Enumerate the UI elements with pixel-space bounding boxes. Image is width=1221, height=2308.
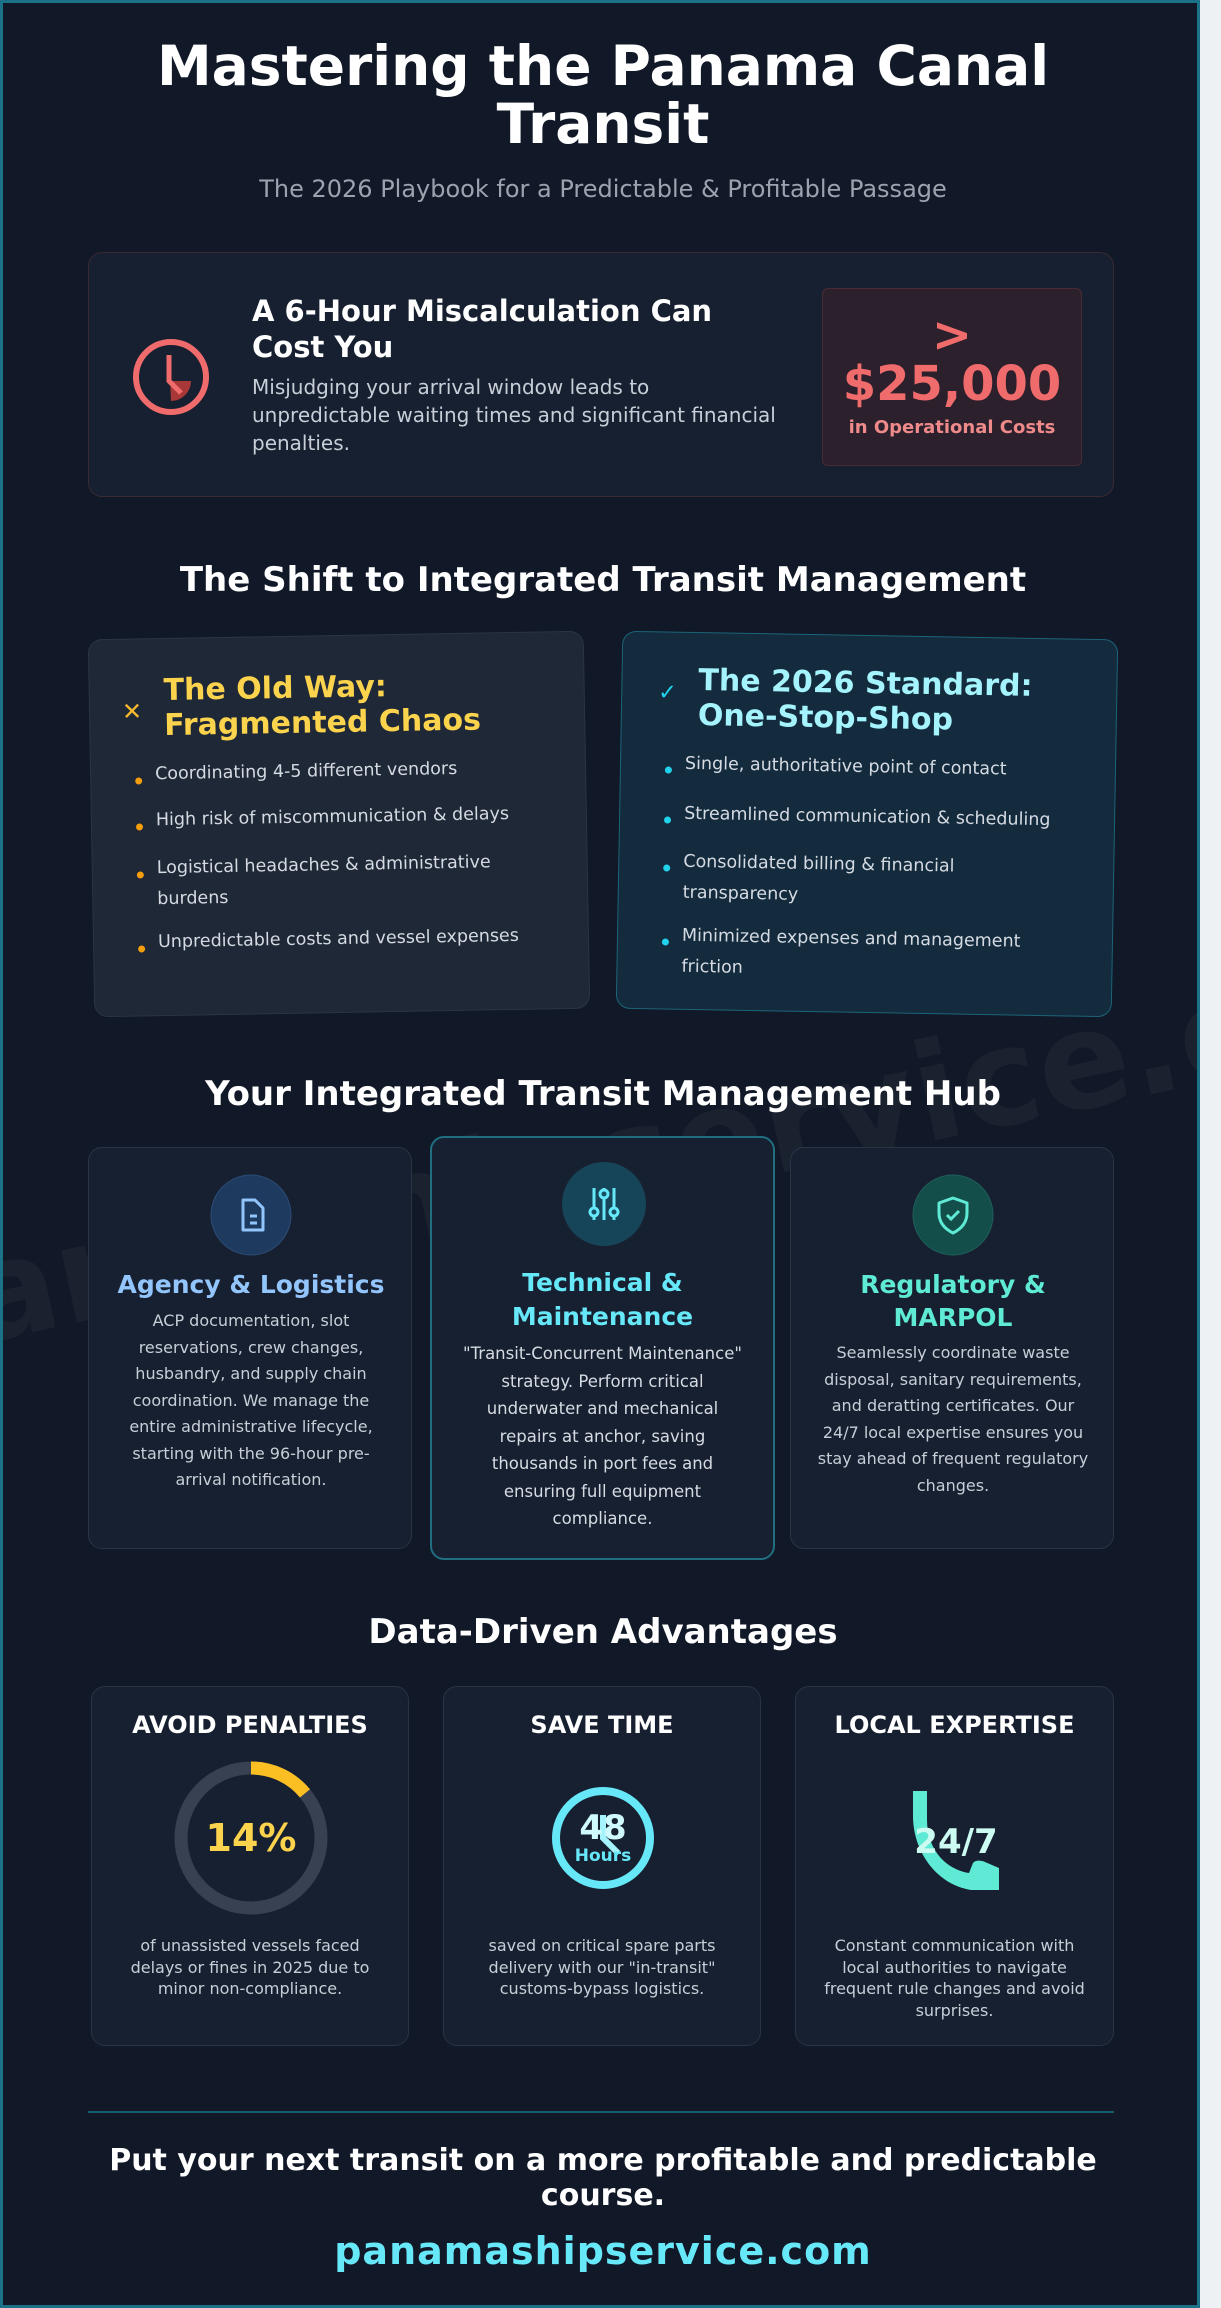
icon: document bbox=[210, 1174, 292, 1256]
alert heading: A 6-Hour Miscalculation Can Cost You bbox=[252, 294, 712, 364]
panel: 2026 standard bbox=[616, 631, 1118, 1017]
regulatory title: Regulatory & bbox=[860, 1270, 1046, 1299]
stat title: SAVE TIME bbox=[530, 1711, 674, 1739]
regulatory text: Seamlessly coordinate waste disposal, sanitary requirements, and deratting certificates. Our 24/7 local expertise ensures you stay ahead of frequent regulatory changes. bbox=[818, 1343, 1088, 1494]
stat: local bbox=[795, 1686, 1114, 2046]
heading: hub: Your Integrated Transit Management Hub bbox=[205, 1074, 1001, 1114]
icon: sliders bbox=[562, 1162, 646, 1246]
old way bullets: Logistical headaches & administrative burdens bbox=[157, 852, 491, 909]
icon: clock 48 hours bbox=[552, 1787, 654, 1889]
icon: clock bbox=[133, 339, 209, 415]
stat: time bbox=[443, 1686, 761, 2046]
regulatory title: MARPOL bbox=[894, 1303, 1012, 1332]
old way title: Fragmented Chaos bbox=[164, 703, 481, 743]
stat title: AVOID PENALTIES bbox=[132, 1711, 368, 1739]
standard bullets: Streamlined communication & scheduling bbox=[684, 804, 1051, 830]
technical title: Technical & bbox=[522, 1268, 683, 1297]
title: Mastering the Panama Canal bbox=[157, 34, 1049, 98]
technical title bbox=[512, 1268, 693, 1331]
icon: phone 24/7: 24/7 bbox=[914, 1822, 998, 1862]
icon: clock 48 hours: 48 bbox=[579, 1808, 627, 1848]
panel: agency bbox=[88, 1147, 412, 1549]
agency text: ACP documentation, slot reservations, crew changes, husbandry, and supply chain coordination. We manage the entire administrative lifecycle, starting with the 96-hour pre-arrival notification. bbox=[129, 1311, 373, 1489]
standard bullets bbox=[662, 754, 1051, 978]
standard title: One-Stop-Shop bbox=[698, 698, 953, 737]
old way bullets bbox=[135, 759, 519, 952]
stat title: LOCAL EXPERTISE bbox=[835, 1711, 1074, 1739]
call to action: Put your next transit on a more profitable and predictable course. bbox=[109, 2143, 1097, 2213]
icon: x: ✕ bbox=[122, 697, 142, 726]
title: Transit bbox=[497, 92, 709, 156]
standard bullets: Consolidated billing & financial transparency bbox=[683, 852, 955, 905]
alert text: Misjudging your arrival window leads to unpredictable waiting times and significant financial penalties. bbox=[252, 375, 776, 455]
stat text: of unassisted vessels faced delays or fines in 2025 due to minor non-compliance. bbox=[131, 1936, 369, 1998]
standard title: The 2026 Standard: bbox=[698, 663, 1033, 704]
divider bbox=[88, 2111, 1114, 2113]
technical text: "Transit-Concurrent Maintenance" strategy. Perform critical underwater and mechanical repairs at anchor, saving thousands in port fees and ensuring full equipment compliance. bbox=[463, 1344, 742, 1528]
regulatory title bbox=[860, 1270, 1046, 1332]
icon: phone 24/7 bbox=[913, 1791, 999, 1890]
old way title bbox=[163, 669, 481, 743]
stat text: Constant communication with local authorities to navigate frequent rule changes and avoid surprises. bbox=[824, 1936, 1085, 2020]
cost stat box bbox=[822, 288, 1082, 466]
old way bullets: Coordinating 4-5 different vendors bbox=[155, 759, 457, 784]
heading: shift: The Shift to Integrated Transit Management bbox=[180, 560, 1026, 600]
url: panamashipservice.com bbox=[334, 2229, 872, 2273]
standard title bbox=[698, 663, 1033, 737]
standard bullets: Minimized expenses and management friction bbox=[681, 926, 1021, 978]
cost stat box: > bbox=[932, 307, 972, 363]
icon: shield bbox=[912, 1174, 994, 1256]
technical title: Maintenance bbox=[512, 1302, 693, 1331]
subtitle: The 2026 Playbook for a Predictable & Profitable Passage bbox=[259, 175, 947, 203]
stat text: saved on critical spare parts delivery with our "in-transit" customs-bypass logistics. bbox=[488, 1936, 715, 1998]
panel: old way bbox=[88, 631, 590, 1017]
standard bullets: Single, authoritative point of contact bbox=[685, 754, 1007, 779]
cost stat box: in Operational Costs bbox=[849, 417, 1055, 438]
title bbox=[157, 34, 1049, 156]
stat: penalties bbox=[91, 1686, 409, 2046]
donut chart 14% bbox=[174, 1762, 328, 1914]
panel: regulatory bbox=[790, 1147, 1114, 1549]
alert card bbox=[88, 252, 1114, 497]
old way title: The Old Way: bbox=[163, 669, 387, 708]
cost stat box: $25,000 bbox=[843, 356, 1061, 412]
panel: technical bbox=[430, 1136, 775, 1560]
heading: data: Data-Driven Advantages bbox=[368, 1612, 838, 1652]
donut chart 14%: 14% bbox=[206, 1816, 296, 1860]
icon: check: ✓ bbox=[658, 680, 677, 706]
agency title: Agency & Logistics bbox=[118, 1270, 384, 1299]
old way bullets: Unpredictable costs and vessel expenses bbox=[158, 926, 519, 952]
icon: clock 48 hours: Hours bbox=[575, 1846, 631, 1866]
old way bullets: High risk of miscommunication & delays bbox=[156, 804, 509, 830]
